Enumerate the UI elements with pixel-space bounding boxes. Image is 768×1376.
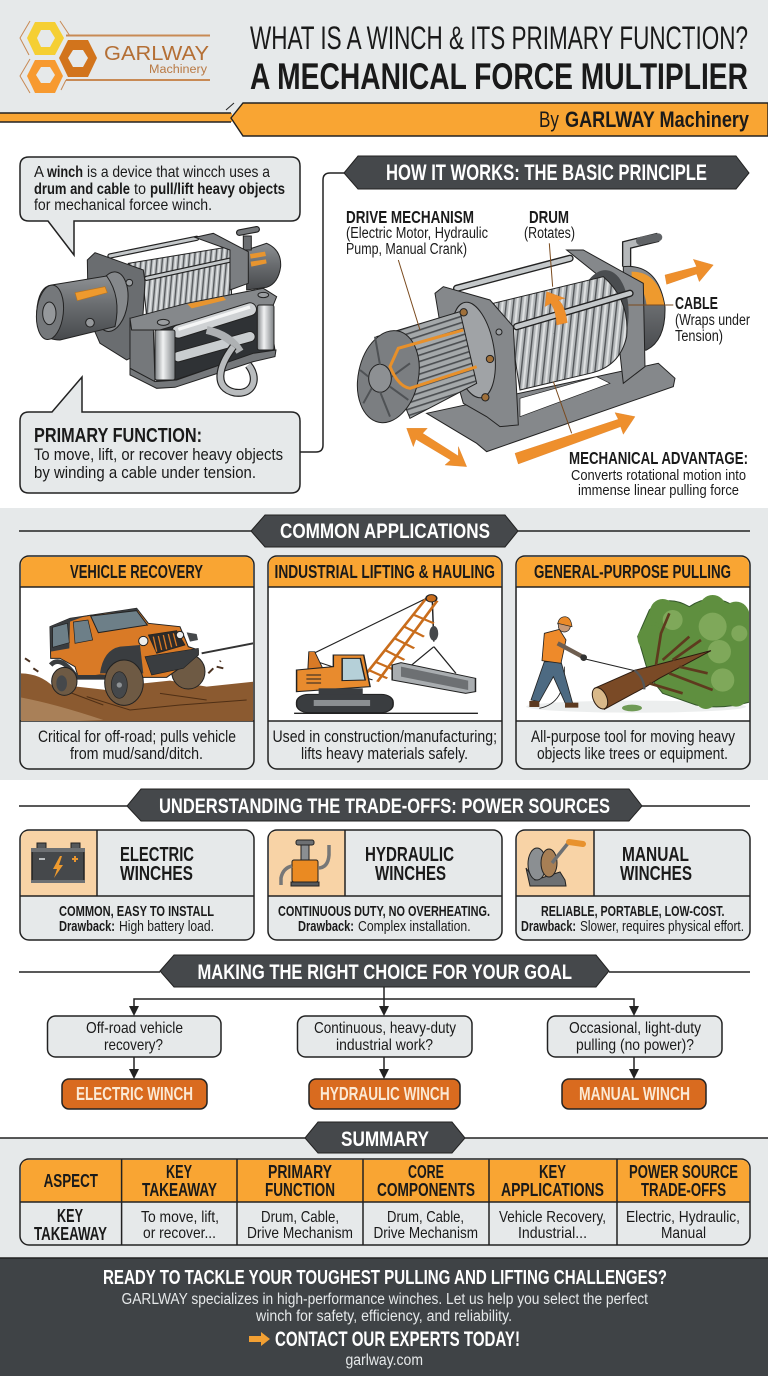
orange byline band: By xyxy=(539,107,559,132)
leader lines xyxy=(398,243,673,433)
panel: hydraulic winches: HYDRAULIC xyxy=(365,844,454,866)
heading: summary xyxy=(305,1122,465,1153)
callout: winch definition: A xyxy=(34,164,44,181)
heading: making the right choice: MAKING THE RIGHT CHOICE FOR YOUR GOAL xyxy=(198,961,572,984)
table header row: ASPECT xyxy=(44,1171,98,1191)
icon: orange arrow xyxy=(249,1332,270,1346)
table data row: KEY xyxy=(57,1206,83,1226)
label: drive mechanism xyxy=(346,207,488,258)
label: cable xyxy=(675,293,750,345)
result: hydraulic winch xyxy=(309,1079,460,1109)
callout: primary function: PRIMARY FUNCTION: xyxy=(34,425,202,447)
footer: call to action: GARLWAY specializes in high-performance winches. Let us help you select the perfect xyxy=(122,1291,649,1308)
label: cable: (Wraps under xyxy=(675,312,750,329)
result: electric winch xyxy=(62,1079,207,1109)
label: cable: CABLE xyxy=(675,293,718,313)
label: mechanical advantage: immense linear pulling force xyxy=(578,482,739,499)
table data row: Electric, Hydraulic, xyxy=(626,1209,740,1226)
decision: off-road recovery: Off-road vehicle xyxy=(86,1020,183,1037)
panel: manual winches xyxy=(516,830,750,940)
table header row: PRIMARY xyxy=(268,1162,332,1182)
decision: occasional light duty: pulling (no power)? xyxy=(576,1037,694,1054)
table data row: Drive Mechanism xyxy=(374,1225,478,1242)
panel: electric winches: COMMON, EASY TO INSTALL xyxy=(59,903,214,920)
panel: vehicle recovery xyxy=(20,556,254,769)
table header row: FUNCTION xyxy=(265,1180,335,1200)
callout: winch definition: to xyxy=(134,181,146,198)
panel: hydraulic winches: Drawback: xyxy=(298,918,354,935)
callout: winch definition: winch xyxy=(46,164,83,181)
orange byline band xyxy=(0,103,768,136)
table data row: or recover... xyxy=(143,1225,216,1242)
callout: primary function xyxy=(20,377,300,493)
panel: vehicle recovery: from mud/sand/ditch. xyxy=(70,745,203,763)
label: drive mechanism: Pump, Manual Crank) xyxy=(346,241,467,258)
callout: winch definition xyxy=(20,157,300,255)
table data row: Drum, Cable, xyxy=(261,1209,339,1226)
panel: electric winches: ELECTRIC xyxy=(120,844,194,866)
icon: hand crank winch xyxy=(526,842,583,886)
callout: winch definition: is a device that wincch uses a xyxy=(87,164,270,181)
panel: hydraulic winches xyxy=(268,830,502,940)
table header row: COMPONENTS xyxy=(377,1180,475,1200)
table header row: KEY xyxy=(539,1162,566,1182)
illustration: winch with fairlead and hook xyxy=(34,229,281,393)
flow chart: decision tree xyxy=(48,987,722,1109)
footer: call to action: CONTACT OUR EXPERTS TODAY! xyxy=(275,1328,520,1351)
icon: hydraulic pump xyxy=(281,840,329,886)
result: manual winch: MANUAL WINCH xyxy=(579,1084,690,1104)
panel: manual winches: Drawback: xyxy=(521,918,576,935)
label: cable: Tension) xyxy=(675,328,723,345)
label: drum: (Rotates) xyxy=(524,225,575,242)
table header row: TRADE-OFFS xyxy=(641,1180,726,1200)
panel: electric winches: Drawback: xyxy=(59,918,115,935)
heading: trade-offs: UNDERSTANDING THE TRADE-OFFS: POWER SOURCES xyxy=(159,795,610,818)
panel: electric winches xyxy=(20,830,254,940)
callout: winch definition: pull/lift heavy objects xyxy=(150,181,285,198)
label: drum: DRUM xyxy=(529,207,569,227)
panel: general-purpose pulling: objects like trees or equipment. xyxy=(537,745,728,763)
illustration: jeep in mud xyxy=(20,608,253,723)
logo: GARLWAY Machinery: GARLWAY xyxy=(104,43,209,65)
table header row xyxy=(44,1162,738,1200)
arrow: cable pull xyxy=(665,259,713,284)
table header row: TAKEAWAY xyxy=(142,1180,217,1200)
callout: primary function: by winding a cable under tension. xyxy=(34,464,256,482)
table header row: KEY xyxy=(166,1162,192,1182)
footer: call to action xyxy=(0,1258,768,1376)
heading: how it works xyxy=(344,156,749,189)
table: summary xyxy=(20,1159,750,1245)
callout: winch definition: for mechanical forcee winch. xyxy=(34,197,212,214)
illustration: worker pulling fallen tree xyxy=(526,595,751,713)
callout: winch definition: drum and cable xyxy=(34,181,130,198)
heading: common applications: COMMON APPLICATIONS xyxy=(280,520,490,543)
title xyxy=(250,20,748,97)
table data row: Vehicle Recovery, xyxy=(499,1209,606,1226)
panel: general-purpose pulling xyxy=(516,556,751,769)
decision: continuous duty: industrial work? xyxy=(336,1037,433,1054)
panel: industrial lifting and hauling: Used in construction/manufacturing; xyxy=(272,728,497,746)
label: mechanical advantage xyxy=(569,448,748,499)
heading: summary: SUMMARY xyxy=(341,1128,429,1151)
decision: occasional light duty xyxy=(548,1016,722,1057)
table data row: Drive Mechanism xyxy=(247,1225,353,1242)
panel: hydraulic winches: CONTINUOUS DUTY, NO OVERHEATING. xyxy=(278,903,490,920)
footer: call to action: winch for safety, efficiency, and reliability. xyxy=(255,1308,512,1325)
callout: primary function: To move, lift, or recover heavy objects xyxy=(34,446,283,464)
table data row: Drum, Cable, xyxy=(387,1209,464,1226)
table header row: CORE xyxy=(408,1162,444,1182)
result: electric winch: ELECTRIC WINCH xyxy=(76,1084,193,1104)
diagram: labelled winch xyxy=(349,237,713,467)
decision: off-road recovery xyxy=(48,1016,221,1057)
decision: occasional light duty: Occasional, light-duty xyxy=(569,1020,701,1037)
footer: call to action: garlway.com xyxy=(346,1352,423,1369)
panel: manual winches: MANUAL xyxy=(622,844,689,866)
panel: hydraulic winches: WINCHES xyxy=(375,863,446,885)
illustration: crawler crane xyxy=(294,595,478,713)
arrow: rotation xyxy=(545,292,567,325)
table data row xyxy=(34,1206,740,1244)
table data row: To move, lift, xyxy=(141,1209,219,1226)
panel: manual winches: WINCHES xyxy=(620,863,692,885)
label: drum xyxy=(524,207,575,242)
logo: GARLWAY Machinery xyxy=(20,21,210,93)
panel: vehicle recovery: VEHICLE RECOVERY xyxy=(70,562,203,582)
panel: electric winches: High battery load. xyxy=(119,918,214,935)
logo: GARLWAY Machinery: Machinery xyxy=(149,64,207,76)
panel: vehicle recovery: Critical for off-road; pulls vehicle xyxy=(38,728,236,746)
heading: trade-offs xyxy=(127,789,642,821)
result: manual winch xyxy=(562,1079,706,1109)
table data row: TAKEAWAY xyxy=(34,1224,107,1244)
table data row: Industrial... xyxy=(518,1225,587,1242)
label: drive mechanism: DRIVE MECHANISM xyxy=(346,207,474,227)
heading: making the right choice xyxy=(160,955,609,987)
panel: industrial lifting and hauling: INDUSTRIAL LIFTING & HAULING xyxy=(274,562,495,582)
decision: continuous duty xyxy=(298,1016,472,1057)
result: hydraulic winch: HYDRAULIC WINCH xyxy=(320,1084,450,1104)
panel: industrial lifting and hauling xyxy=(268,556,502,769)
panel: electric winches: WINCHES xyxy=(120,863,193,885)
arrow: linear force xyxy=(515,413,635,464)
decision: continuous duty: Continuous, heavy-duty xyxy=(314,1020,456,1037)
arrow: base movement xyxy=(407,428,467,467)
heading: common applications xyxy=(251,515,518,547)
decision: off-road recovery: recovery? xyxy=(104,1037,163,1054)
table header row: APPLICATIONS xyxy=(501,1180,604,1200)
panel: industrial lifting and hauling: lifts heavy materials safely. xyxy=(301,745,468,763)
table data row: Manual xyxy=(661,1225,706,1242)
panel: hydraulic winches: Complex installation. xyxy=(358,918,471,935)
label: drive mechanism: (Electric Motor, Hydraulic xyxy=(346,225,488,242)
icon: battery xyxy=(31,843,85,883)
header background xyxy=(0,0,768,120)
